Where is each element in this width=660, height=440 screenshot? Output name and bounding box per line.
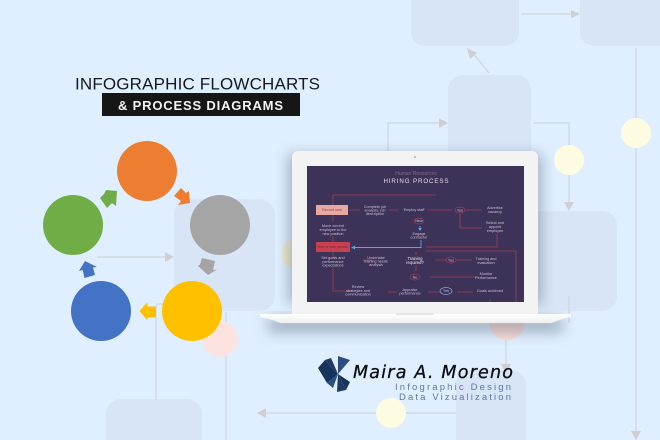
screen labels: Complete job xyxy=(364,205,386,209)
screen labels: communication xyxy=(345,292,371,296)
laptop body xyxy=(292,151,538,314)
logo name: Maira A. Moreno xyxy=(353,363,513,383)
logo mark xyxy=(318,356,350,392)
screen labels: employee xyxy=(487,229,503,233)
arrow: orange xyxy=(174,188,190,205)
arrow: green xyxy=(100,190,117,208)
screen labels: Engage xyxy=(412,232,426,236)
step: blue circle xyxy=(71,281,131,341)
screen labels: performance xyxy=(322,260,344,264)
screen labels: performance xyxy=(399,292,421,296)
title: INFOGRAPHIC FLOWCHARTS xyxy=(75,74,320,94)
laptop base xyxy=(260,313,571,323)
screen labels: Yes xyxy=(448,258,454,262)
screen labels: Move current xyxy=(322,224,345,228)
screen labels: strategies and xyxy=(346,289,370,293)
screen labels: Hire a new person xyxy=(318,245,348,249)
screen labels: Employ staff xyxy=(404,208,425,212)
screen heading xyxy=(384,171,448,185)
cycle diagram xyxy=(43,141,250,341)
screen heading: HIRING PROCESS xyxy=(384,178,448,185)
logo xyxy=(318,356,513,403)
screen heading: Human Resources xyxy=(395,171,437,177)
screen labels: new position xyxy=(322,232,344,236)
screen labels: Recruit new xyxy=(322,208,342,212)
screen labels: Training xyxy=(408,256,423,261)
arrow: blue xyxy=(79,261,97,278)
step: yellow circle xyxy=(162,281,222,341)
screen labels: expectations xyxy=(322,264,344,268)
screen labels: vacancy xyxy=(488,210,502,214)
screen labels: analysis, job xyxy=(365,208,385,212)
arrow: gray xyxy=(198,258,217,275)
screen labels: evaluation xyxy=(477,261,495,265)
screen labels: Monitor xyxy=(480,272,493,276)
screen labels: Review xyxy=(352,285,364,289)
screen labels: Yes xyxy=(443,289,449,293)
decision ovals xyxy=(410,207,465,280)
screen labels: appoint xyxy=(489,225,502,229)
logo tagline: Infographic Design xyxy=(395,382,511,393)
arrow: yellow xyxy=(140,302,156,320)
step: orange circle xyxy=(117,141,177,201)
screen labels: Appraise xyxy=(402,288,418,292)
screen labels: analysis xyxy=(369,263,383,267)
step: gray circle xyxy=(190,195,250,255)
screen labels: Yes xyxy=(457,208,463,212)
logo tagline second line: Data Vizualization xyxy=(399,392,511,403)
screen labels: Advertise xyxy=(487,206,503,210)
screen labels: New xyxy=(415,219,423,223)
screen labels: Performance xyxy=(475,276,497,280)
step: green circle xyxy=(43,195,103,255)
laptop xyxy=(260,151,571,332)
laptop shadow xyxy=(268,318,563,332)
subtitle banner xyxy=(102,93,300,116)
connector lines xyxy=(333,195,516,302)
screen labels: No xyxy=(413,275,417,279)
subtitle banner: & PROCESS DIAGRAMS xyxy=(118,98,283,113)
screen: hiring process chart xyxy=(307,166,524,302)
screen labels: description xyxy=(366,212,384,216)
screen labels: Undertake xyxy=(367,256,385,260)
screen labels: Goals achieved xyxy=(477,289,503,293)
process boxes xyxy=(316,205,348,215)
screen labels xyxy=(318,205,504,296)
screen labels: Training and xyxy=(476,257,496,261)
screen labels: employee to the xyxy=(319,228,347,232)
screen labels: Set goals and xyxy=(321,256,345,260)
screen labels: required? xyxy=(406,260,425,265)
screen labels: training needs xyxy=(364,260,388,264)
screen labels: Select and xyxy=(486,221,504,225)
screen labels: contractor xyxy=(411,236,428,240)
